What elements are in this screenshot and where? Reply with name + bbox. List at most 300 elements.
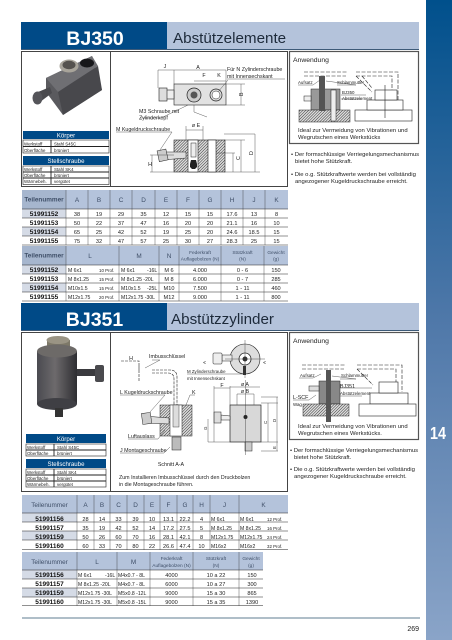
- drawing: application: Abstützelement: [340, 391, 371, 396]
- panel: BJ351 Anwendung: Wegrutschen eines Werkstücks.: [298, 431, 382, 437]
- table: BJ350 specifications: Teilenummer: [24, 252, 64, 260]
- table: BJ350 dimensions: 19: [96, 212, 102, 218]
- table: BJ351 specifications: Gewicht: [242, 556, 260, 562]
- table: BJ350 dimensions: 29: [118, 212, 124, 218]
- table: BJ350 specifications: M10x1.5: [121, 286, 141, 292]
- table: BJ350 specifications: 20 Prof.: [99, 295, 114, 300]
- table: BJ351 dimensions: M 8x1.25: [240, 526, 261, 532]
- table: BJ350 specifications: Auflagebolzen (N): [181, 256, 220, 262]
- drawing: application: BJ350: [342, 90, 355, 95]
- table: BJ350 dimensions: 22: [96, 221, 102, 227]
- panel: BJ350 technical drawing: [110, 52, 288, 186]
- photo: BJ350 block: [32, 56, 102, 115]
- table: BJ350 specifications: M12x1.75: [68, 295, 91, 301]
- table: Stellschraube: vergütet: [57, 482, 74, 487]
- table: BJ351 dimensions: 22: [149, 544, 155, 550]
- panel: BJ351 technical drawing: in die Montageschraube führen.: [119, 482, 194, 488]
- table: BJ351 dimensions: 60: [115, 535, 122, 541]
- table: BJ351 specifications: 6000: [165, 582, 178, 588]
- drawing: BJ351 section view: Schnitt A-A: [158, 462, 185, 468]
- text: installation note: Zum Installieren Imbusschlüssel durch den Druckbolzen: [119, 475, 250, 481]
- table: BJ350 specifications: 285: [271, 277, 281, 283]
- table: Körper: Oberfläche: [24, 148, 46, 153]
- table: BJ351 dimensions: 47.4: [180, 544, 190, 550]
- table: BJ350 dimensions: H: [230, 197, 235, 204]
- table: BJ350 dimensions: 51991152: [30, 211, 59, 218]
- table: BJ351 dimensions: M12x1.75: [240, 535, 263, 541]
- table: BJ351 specifications: -16L: [105, 573, 115, 579]
- table: Stellschraube: [23, 156, 109, 184]
- table: BJ351 dimensions: 27.5: [180, 526, 190, 532]
- panel: BJ350 Anwendung: Wegrutschen eines Werkstücks: [298, 135, 380, 141]
- drawing: BJ351 top view: [187, 340, 267, 381]
- table: BJ351 dimensions: 80: [132, 544, 139, 550]
- table: BJ350 dimensions: 28.3: [227, 239, 237, 245]
- heading: BJ351: BJ351: [66, 309, 123, 331]
- drawing: application: Aufsatz: [298, 80, 313, 85]
- table: BJ351 specifications: M: [131, 559, 136, 566]
- table: BJ351 dimensions: [22, 495, 288, 550]
- table: BJ351 dimensions: 51991160: [35, 543, 64, 550]
- table: BJ350 specifications: 7.500: [193, 286, 207, 292]
- drawing: BJ350 top view: F: [202, 73, 206, 79]
- photo: BJ351 cylinder: [37, 336, 104, 417]
- table: BJ351 dimensions: F: [167, 502, 171, 509]
- table: BJ351 dimensions: 70: [115, 544, 122, 550]
- table: Stellschraube: Stellschraube: [48, 461, 85, 468]
- table: BJ351 specifications: M4x0.7 - 8L: [118, 573, 145, 579]
- table: BJ351 specifications: Auflagebolzen (N): [152, 563, 191, 569]
- table: BJ351 specifications: 51991159: [35, 590, 64, 597]
- table: BJ350 dimensions: 16: [251, 221, 257, 227]
- heading: BJ350: BJ350: [66, 28, 124, 50]
- table: BJ350 specifications: 1 - 11: [236, 286, 249, 292]
- table: BJ350 specifications: Gewicht: [267, 250, 285, 256]
- table: BJ350 dimensions: F: [186, 197, 190, 204]
- table: BJ351 specifications: M5x0.8 -12L: [118, 591, 146, 597]
- table: BJ351 dimensions: 8: [200, 535, 203, 541]
- table: BJ350 dimensions: 57: [140, 239, 147, 245]
- table: BJ350 dimensions: 42: [118, 230, 124, 236]
- table: BJ350 specifications: M10x1.5: [68, 286, 88, 292]
- drawing: BJ351 section view: L Kugeldruckschraube: [120, 390, 173, 396]
- table: BJ351 dimensions: 4: [200, 517, 203, 523]
- table: BJ350 dimensions: Teilenummer: [24, 196, 64, 204]
- table: BJ350 specifications: Federkraft: [189, 250, 212, 256]
- table: BJ350 specifications: L: [88, 253, 92, 260]
- table: BJ351 dimensions: B: [100, 502, 104, 509]
- text: BJ350 bullet notes: angezogener Kugeldruckschraube erreicht.: [295, 179, 408, 185]
- table: BJ351 dimensions: D: [133, 502, 138, 509]
- table: BJ350 dimensions: 15: [207, 212, 213, 218]
- table: BJ351 dimensions: M 6x1: [240, 517, 254, 523]
- table: BJ351 dimensions: M16x2: [240, 544, 255, 550]
- drawing: BJ350 top view: mit Innensechskant: [227, 74, 273, 80]
- table: BJ351 specifications: M 6x1: [78, 573, 92, 579]
- table: BJ350 dimensions: 52: [140, 230, 147, 236]
- table: BJ351 dimensions: A: [83, 502, 88, 509]
- drawing: BJ351 side view: G: [203, 426, 208, 430]
- table: BJ351 specifications: M4x0.7 - 8L: [118, 582, 145, 588]
- table: BJ350 specifications: 15 Prof.: [99, 277, 114, 282]
- table: Stellschraube: Stahl SK4: [54, 167, 74, 172]
- table: Körper: brüniert: [54, 148, 70, 153]
- table: BJ350 dimensions: 16: [163, 221, 169, 227]
- table: BJ350 specifications: 15 Prof.: [99, 286, 114, 291]
- table: BJ350 dimensions: 25: [251, 239, 257, 245]
- drawing: BJ351 top view: M Zylinderschraube: [187, 369, 226, 374]
- table: Stellschraube: Oberfläche: [24, 173, 46, 178]
- table: BJ350 dimensions: 37: [118, 221, 124, 227]
- footer rule: [22, 618, 420, 619]
- table: BJ350 specifications: N: [167, 253, 172, 260]
- heading: BJ351: Abstützzylinder: [171, 311, 274, 328]
- table: BJ351 dimensions: 33: [115, 517, 122, 523]
- drawing: application: BJ351: [340, 384, 355, 390]
- table: BJ350 specifications: M 8: [164, 277, 174, 283]
- drawing: BJ351 side view: [203, 380, 278, 455]
- drawing: BJ351 side view: ø B: [241, 389, 250, 395]
- text: BJ350 bullet notes: bietet hohe Stützkraft.: [295, 159, 353, 165]
- table: BJ350 specifications: M 6x1: [121, 268, 135, 274]
- table: BJ350 dimensions: 50: [74, 221, 80, 227]
- table: BJ350 dimensions: [22, 190, 288, 245]
- drawing: BJ351 side view: E: [272, 446, 277, 449]
- table: BJ351 dimensions: 12 Prof.: [267, 517, 282, 522]
- table: BJ350 dimensions: K: [274, 197, 279, 204]
- table: BJ350 dimensions: 75: [74, 239, 80, 245]
- table: Stellschraube: Werkstoff: [24, 167, 43, 172]
- table: BJ351 dimensions: 50: [82, 535, 89, 541]
- table: BJ351 specifications: 51991157: [35, 581, 64, 588]
- panel: BJ350 product and material: [22, 52, 110, 186]
- table: BJ351 dimensions: 33: [99, 544, 105, 550]
- drawing: BJ350 top view: J: [164, 64, 167, 70]
- table: BJ351 specifications: [22, 552, 263, 606]
- text: application note: Ideal zur Vermeidung von Vibrationen und: [298, 424, 408, 430]
- drawing: BJ350 top view: M3 Schraube mit: [139, 109, 180, 115]
- heading: BJ351: [21, 303, 419, 331]
- table: BJ351 specifications: 10 a 22: [207, 573, 225, 579]
- table: BJ351 specifications: 9000: [165, 600, 178, 606]
- table: BJ351 specifications: 9000: [165, 591, 178, 597]
- table: BJ351 dimensions: 42.1: [180, 535, 190, 541]
- table: BJ350 dimensions: 15: [273, 230, 280, 236]
- table: BJ350 specifications: 1 - 11: [236, 295, 249, 301]
- table: Stellschraube: Oberfläche: [27, 476, 49, 481]
- table: BJ351 dimensions: 60: [82, 544, 89, 550]
- table: BJ351 dimensions: G: [183, 502, 188, 509]
- table: BJ351 dimensions: 22.2: [180, 517, 190, 523]
- table: BJ350 dimensions: 10: [273, 221, 280, 227]
- table: BJ351 specifications: L: [95, 559, 99, 566]
- panel: BJ350 Anwendung: [290, 52, 418, 144]
- table: BJ350 specifications: M 8x1.25 -20L: [121, 277, 154, 283]
- table: BJ350 specifications: 4.000: [193, 268, 207, 274]
- table: BJ351 specifications: 51991160: [35, 599, 64, 606]
- table: BJ350 dimensions: 30: [185, 239, 191, 245]
- table: BJ350 dimensions: 25: [96, 230, 102, 236]
- table: BJ350 specifications: M 6x1: [68, 268, 82, 274]
- table: BJ350 specifications: -25L: [147, 286, 157, 292]
- table: BJ350 dimensions: 51991155: [30, 238, 59, 245]
- table: BJ350 specifications: Stützkraft: [232, 250, 253, 256]
- table: BJ351 dimensions: M16x2: [211, 544, 226, 550]
- text: BJ350 bullet notes: • Die o.g. Stützkraftwerte werden bei vollständig: [291, 172, 416, 178]
- table: Körper: Werkstoff: [27, 445, 46, 450]
- text: BJ351 bullet notes: • Der formschlüssige Verriegelungsmechanismus: [290, 448, 418, 454]
- text: BJ350 bullet notes: [291, 152, 419, 185]
- table: BJ350 dimensions: 51991154: [30, 229, 59, 236]
- drawing: BJ350 top view: Für N Zylinderschraube: [227, 67, 282, 73]
- drawing: application: Schlammutter: [341, 373, 369, 378]
- table: BJ350 specifications: 800: [271, 295, 281, 301]
- table: BJ351 specifications: M12x1.75 -30L: [78, 600, 112, 606]
- table: Stellschraube: Wärmebeh.: [27, 482, 50, 487]
- table: BJ350 specifications: 51991153: [30, 276, 59, 283]
- table: BJ351 dimensions: 10: [198, 544, 205, 550]
- text: BJ351 bullet notes: angezogener Kugeldruckschraube erreicht.: [294, 474, 407, 480]
- table: BJ350 specifications: 0 - 6: [237, 268, 248, 274]
- table: BJ351 specifications: M5x0.8 -15L: [118, 600, 146, 606]
- table: BJ350 dimensions: D: [141, 197, 146, 204]
- table: Stellschraube: [26, 459, 106, 487]
- table: BJ351 specifications: Teilenummer: [31, 559, 69, 566]
- panel: BJ351 technical drawing: [110, 332, 288, 492]
- table: BJ350 dimensions: 19: [163, 230, 169, 236]
- table: BJ351 dimensions: 35: [82, 526, 89, 532]
- drawing: BJ350 section view: H: [148, 162, 152, 168]
- table: BJ351 dimensions: 13.1: [163, 517, 174, 523]
- table: BJ350 specifications: (N): [239, 256, 246, 262]
- table: BJ351 dimensions: 14: [149, 526, 155, 532]
- drawing: BJ351 side view: C: [263, 421, 268, 424]
- table: BJ350 specifications: -16L: [147, 268, 157, 274]
- table: BJ351 dimensions: 24 Prof.: [267, 535, 282, 540]
- table: BJ351 dimensions: 26.6: [163, 544, 174, 550]
- table: Stellschraube: vergütet: [54, 179, 71, 184]
- table: BJ350 dimensions: 12: [163, 212, 169, 218]
- table: BJ351 dimensions: 28.1: [163, 535, 174, 541]
- drawing: BJ351 section view: Luftauslass: [128, 434, 155, 440]
- table: BJ351 dimensions: 16 Prof.: [267, 526, 282, 531]
- table: BJ350 dimensions: E: [164, 197, 168, 204]
- drawing: BJ351 side view: D: [272, 419, 277, 422]
- table: BJ350 specifications: 51991152: [30, 267, 59, 274]
- table: BJ351 dimensions: 51991159: [35, 534, 64, 541]
- drawing: BJ350 section view: D: [249, 151, 255, 155]
- table: BJ350 dimensions: 18.5: [249, 230, 259, 236]
- table: BJ350 specifications: (g): [273, 256, 279, 262]
- table: BJ350 specifications: M: [136, 253, 142, 260]
- drawing: BJ351 section view: Imbusschlüssel: [149, 354, 185, 360]
- table: BJ350 dimensions: 47: [140, 221, 147, 227]
- table: BJ351 dimensions: 42: [115, 526, 122, 532]
- drawing: BJ350 section view: ø E: [192, 123, 201, 129]
- drawing: application: Abstützelement: [342, 96, 373, 101]
- table: BJ351 specifications: M12x1.75 -30L: [78, 591, 112, 597]
- text: BJ351 bullet notes: • Die o.g. Stützkraftwerte werden bei vollständig: [290, 467, 415, 473]
- table: BJ351 dimensions: 70: [132, 535, 139, 541]
- table: BJ351 dimensions: 51991156: [35, 516, 64, 523]
- table: BJ351 specifications: 51991156: [35, 572, 64, 579]
- table: BJ351 dimensions: 10: [149, 517, 155, 523]
- table: BJ351 dimensions: 19: [99, 526, 105, 532]
- table: BJ350 specifications: M 8x1.25: [68, 277, 89, 283]
- chapter number: 14: [430, 423, 446, 443]
- heading: Anwendung: Anwendung: [293, 338, 329, 345]
- text: application note: Ideal zur Vermeidung von Vibrationen und: [298, 128, 408, 134]
- table: Stellschraube: brüniert: [54, 173, 70, 178]
- drawing: application: [293, 365, 416, 422]
- table: BJ351 specifications: 1390: [246, 600, 258, 606]
- table: BJ350 dimensions: 51991153: [30, 220, 59, 227]
- table: BJ351 specifications: 150: [247, 573, 257, 579]
- table: BJ351 specifications: 865: [247, 591, 257, 597]
- drawing: BJ350 top view: B: [239, 92, 245, 96]
- drawing: BJ350 top view: Zylinderkopf: [139, 116, 168, 122]
- table: Körper: Stahl S45C: [57, 445, 79, 450]
- table: BJ350 dimensions: C: [119, 197, 124, 204]
- table: BJ351 dimensions: E: [150, 502, 154, 509]
- table: BJ350 specifications: 460: [271, 286, 281, 292]
- table: BJ351 specifications: (g): [248, 563, 254, 569]
- table: BJ351 dimensions: 17.2: [163, 526, 174, 532]
- table: BJ351 dimensions: 52: [132, 526, 139, 532]
- table: Stellschraube: Stellschraube: [48, 158, 85, 165]
- table: BJ350 dimensions: G: [208, 197, 213, 204]
- table: BJ350 dimensions: 38: [74, 212, 80, 218]
- table: Körper: Oberfläche: [27, 451, 49, 456]
- table: BJ350 dimensions: 65: [74, 230, 80, 236]
- table: BJ351 dimensions: Teilenummer: [31, 502, 69, 509]
- table: BJ351 dimensions: 16: [149, 535, 155, 541]
- table: BJ350 dimensions: 25: [163, 239, 169, 245]
- drawing: BJ351 section view: [120, 354, 196, 468]
- table: BJ350 dimensions: 17.6: [227, 212, 237, 218]
- table: BJ350 specifications: [22, 246, 288, 301]
- text: BJ351 bullet notes: [290, 448, 418, 480]
- drawing: BJ351 section view: K: [192, 390, 196, 396]
- table: BJ350 dimensions: J: [252, 197, 256, 204]
- table: Stellschraube: Werkstoff: [27, 470, 46, 475]
- table: BJ350 dimensions: 13: [251, 212, 257, 218]
- drawing: application: Schlammutter: [337, 80, 365, 85]
- drawing: application: [298, 72, 412, 122]
- drawing: BJ351 top view: mit Innensechskant: [187, 376, 226, 381]
- heading: BJ350: [21, 22, 419, 50]
- table: BJ350 dimensions: 15: [273, 239, 280, 245]
- table: BJ351 dimensions: 28: [82, 517, 89, 523]
- drawing: BJ351 section view: J Montageschraube: [120, 448, 167, 454]
- table: BJ350 specifications: 150: [271, 268, 281, 274]
- table: BJ351 dimensions: 39: [132, 517, 139, 523]
- panel: BJ351 product and material: [22, 332, 110, 492]
- text: BJ351 bullet notes: bietet hohe Stützkraft.: [294, 455, 352, 461]
- table: BJ350 specifications: 51991155: [30, 294, 59, 301]
- page number: 269: [407, 626, 419, 633]
- table: BJ351 dimensions: M 8x1.25: [211, 526, 232, 532]
- table: BJ351 dimensions: H: [199, 502, 204, 509]
- table: Körper: [23, 131, 109, 153]
- table: BJ351 specifications: 300: [247, 582, 257, 588]
- table: BJ350 dimensions: 8: [275, 212, 278, 218]
- table: BJ350 dimensions: 20: [207, 221, 213, 227]
- drawing: BJ350 top view: K: [217, 73, 221, 79]
- drawing: BJ351 top view: A: [262, 361, 267, 364]
- table: BJ350 specifications: M12x1.75 -30L: [121, 295, 155, 301]
- drawing: BJ350 section view: M Kugeldruckschraube: [116, 127, 170, 133]
- table: BJ351 dimensions: M 6x1: [211, 517, 225, 523]
- table: BJ350 specifications: M10: [164, 286, 174, 292]
- drawing: BJ351 side view: ø A: [241, 382, 249, 388]
- table: Stellschraube: Stahl SK4: [57, 470, 77, 475]
- table: BJ350 specifications: M12: [164, 295, 174, 301]
- drawing: BJ351 side view: F: [220, 383, 224, 389]
- table: BJ350 dimensions: A: [75, 197, 80, 204]
- table: BJ351 specifications: M 8x1.25 -20L: [78, 582, 111, 588]
- table: Körper: Stahl S45C: [54, 142, 76, 146]
- table: BJ350 dimensions: B: [97, 197, 101, 204]
- table: BJ350 specifications: 9.000: [193, 295, 207, 301]
- table: BJ350 dimensions: 21.1: [227, 221, 237, 227]
- table: BJ351 dimensions: 26: [99, 535, 105, 541]
- table: BJ350 specifications: 10 Prof.: [99, 268, 114, 273]
- table: BJ350 dimensions: 47: [118, 239, 124, 245]
- table: Körper: Körper: [57, 132, 75, 140]
- table: Stellschraube: Wärmebeh.: [24, 179, 47, 184]
- table: BJ351 dimensions: 51991157: [35, 525, 64, 532]
- drawing: BJ350 top view: A: [196, 65, 200, 71]
- drawing: BJ351 section view: H: [129, 356, 133, 362]
- table: BJ351 dimensions: 32 Prof.: [267, 544, 282, 549]
- table: BJ351 specifications: Stützkraft: [206, 556, 227, 562]
- table: BJ350 dimensions: 15: [185, 212, 191, 218]
- heading: BJ350: Abstützelemente: [173, 30, 286, 47]
- drawing: BJ351 top view: A: [202, 361, 207, 364]
- table: BJ350 dimensions: 24.6: [227, 230, 237, 236]
- drawing: BJ350 top view: [139, 64, 285, 122]
- table: BJ351 specifications: 10 a 27: [207, 582, 225, 588]
- table: Körper: Werkstoff: [24, 142, 43, 146]
- drawing: BJ350 section view: [116, 123, 260, 172]
- table: BJ351 specifications: (N): [213, 563, 220, 569]
- table: BJ350 specifications: 51991154: [30, 285, 59, 292]
- heading: Anwendung: Anwendung: [293, 57, 329, 64]
- table: Körper: Körper: [57, 436, 75, 443]
- table: BJ350 dimensions: 20: [207, 230, 213, 236]
- table: BJ351 specifications: 4000: [165, 573, 178, 579]
- table: BJ350 specifications: M 6: [164, 268, 174, 274]
- table: BJ350 dimensions: 25: [185, 230, 191, 236]
- table: BJ350 dimensions: 27: [207, 239, 213, 245]
- table: BJ350 specifications: 0 - 7: [237, 277, 248, 283]
- table: BJ351 dimensions: C: [116, 502, 121, 509]
- table: BJ350 dimensions: 32: [96, 239, 102, 245]
- table: Körper: [26, 434, 106, 456]
- drawing: application: Aufsatz: [300, 373, 315, 378]
- table: BJ351 specifications: Federkraft: [161, 556, 183, 562]
- sidebar: chapter tab: [426, 0, 452, 640]
- table: BJ351 specifications: 15 a 30: [207, 591, 225, 597]
- table: BJ351 dimensions: K: [261, 502, 266, 509]
- table: BJ351 dimensions: 14: [99, 517, 105, 523]
- table: BJ350 dimensions: 20: [185, 221, 191, 227]
- table: BJ351 dimensions: J: [223, 502, 226, 509]
- text: BJ350 bullet notes: • Der formschlüssige Verriegelungsmechanismus: [291, 152, 419, 158]
- drawing: application: L-SCF: [293, 395, 309, 401]
- drawing: BJ350 section view: C: [236, 156, 242, 160]
